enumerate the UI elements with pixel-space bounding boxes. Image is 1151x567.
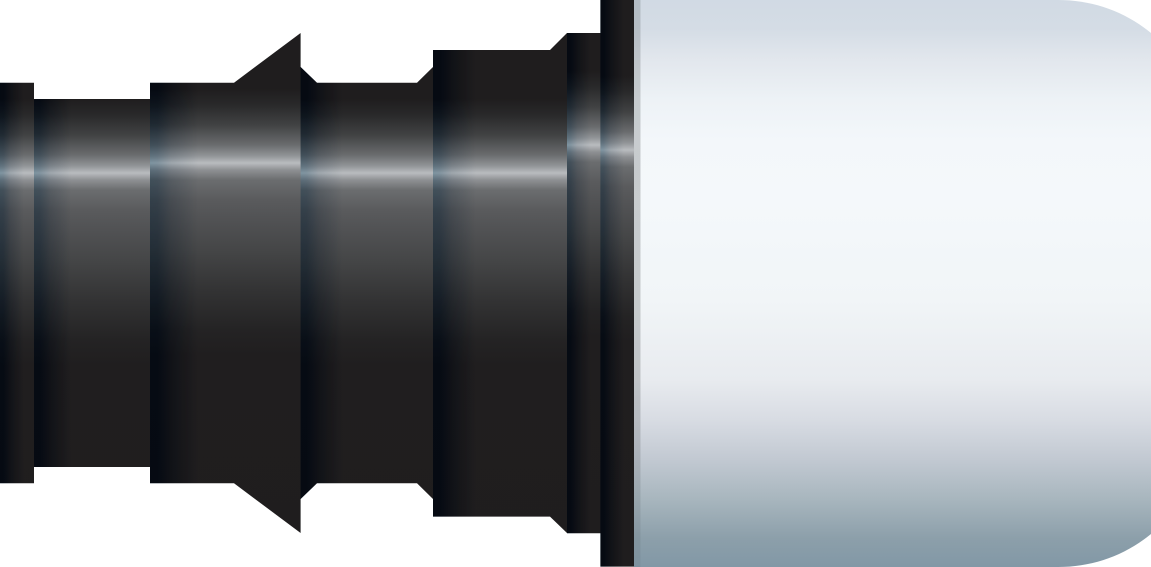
white end cap bbox=[634, 0, 1151, 567]
segment: shoulder ring bbox=[567, 33, 601, 533]
segment: flange bbox=[600, 0, 634, 567]
segment: narrow barrel bbox=[34, 99, 150, 467]
segment: end collar bbox=[0, 83, 34, 483]
segment: middle barrel with chamfers bbox=[300, 66, 433, 500]
segment: wide barrel bbox=[433, 33, 567, 533]
segment: barbed ridge bbox=[150, 33, 301, 533]
